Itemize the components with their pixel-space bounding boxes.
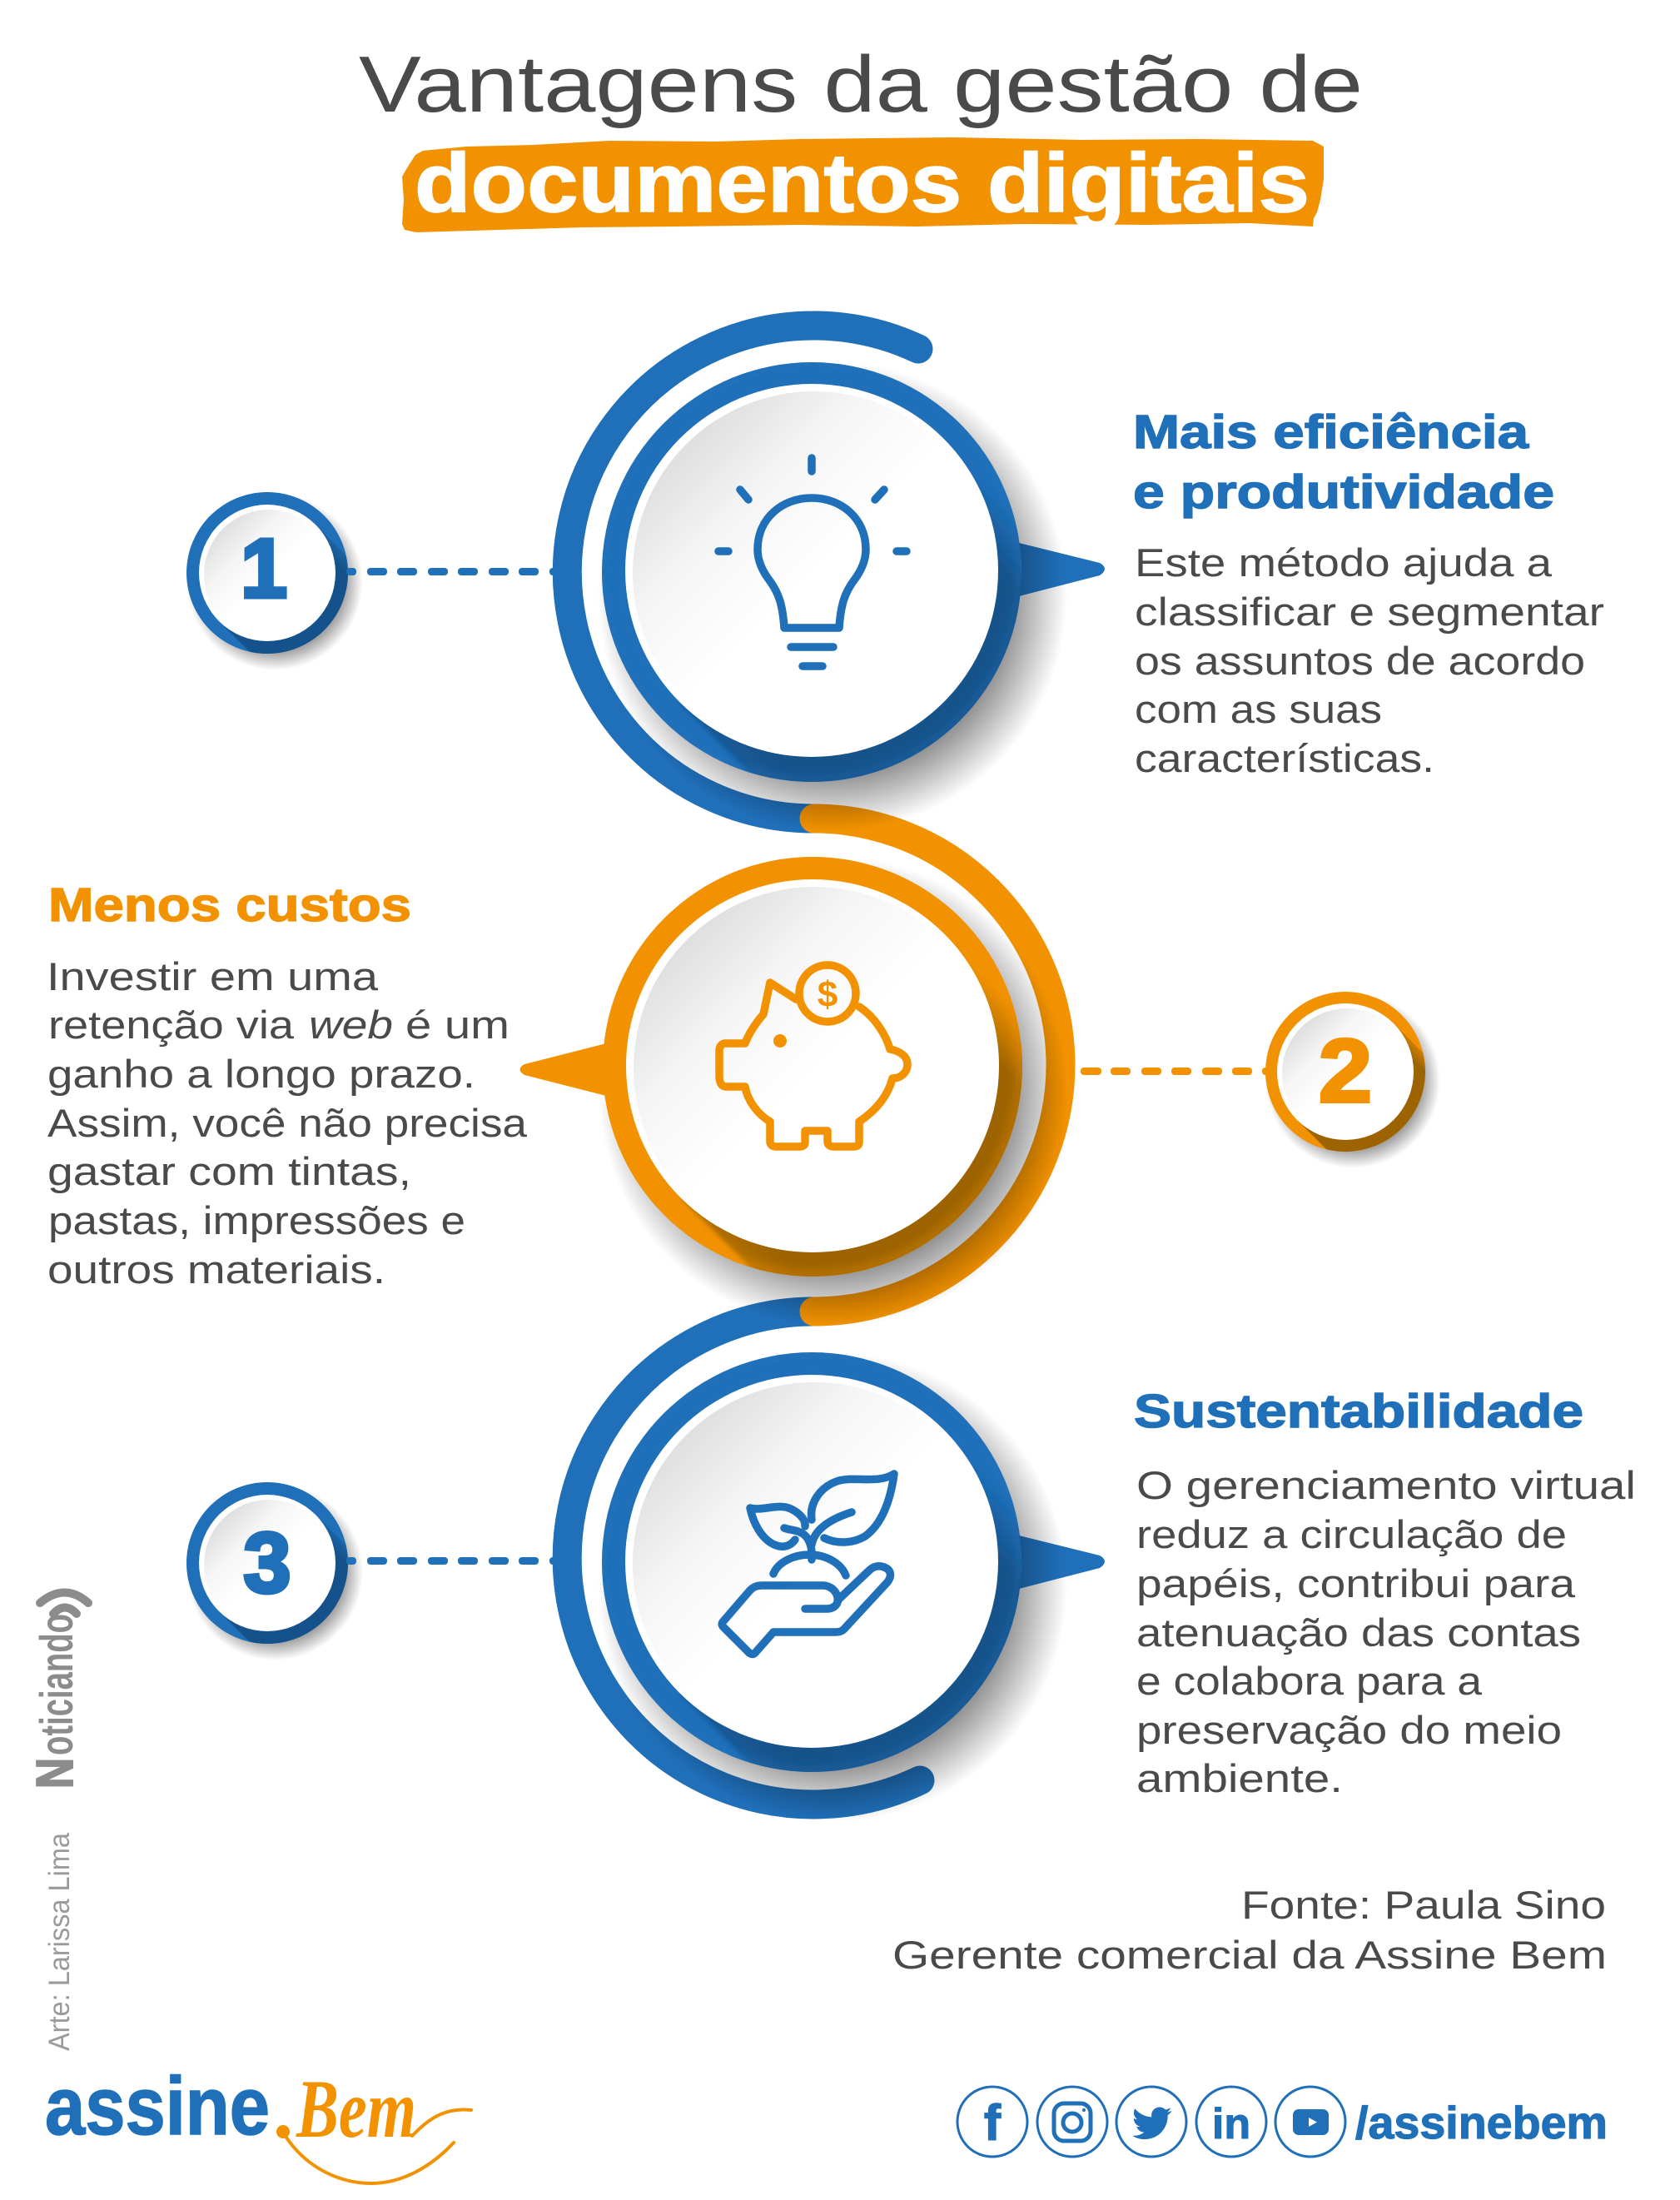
- connecting spiral arcs: [567, 326, 1061, 1804]
- body: outros materiais.: [47, 1247, 385, 1292]
- body: preservação do meio: [1136, 1708, 1562, 1752]
- Noticiando vertical logo: N: [27, 1758, 84, 1789]
- Assine Bem logo: Bem: [296, 2063, 416, 2155]
- icon: linkedin: in: [1212, 2100, 1250, 2148]
- dashed connector 1: [346, 568, 559, 575]
- text block: Menos custos: [47, 879, 528, 1292]
- icon: linkedin: [1196, 2087, 1266, 2157]
- body: papéis, contribui para: [1136, 1561, 1576, 1605]
- dashed connector 3: [346, 1557, 559, 1565]
- badge: number 1: [186, 492, 361, 669]
- Noticiando vertical logo: oticiando: [30, 1614, 82, 1755]
- body: retenção via: [48, 1003, 295, 1047]
- badge: number 2: [1265, 992, 1439, 1167]
- heading: Menos custos: [48, 879, 411, 932]
- text block: Sustentabilidade: [1134, 1385, 1636, 1800]
- heading: Sustentabilidade: [1134, 1385, 1583, 1438]
- body: reduz a circulação de: [1136, 1512, 1567, 1556]
- icon: light bulb: [718, 458, 907, 666]
- body: Assim, você não precisa: [47, 1101, 528, 1145]
- icon: instagram: [1037, 2087, 1107, 2157]
- body: ganho a longo prazo.: [47, 1052, 475, 1096]
- source credit: Gerente comercial da Assine Bem: [892, 1933, 1607, 1977]
- dashed connector 2: [1081, 1068, 1270, 1075]
- title line 1: Vantagens da gestão de: [359, 40, 1363, 129]
- icon: facebook: f: [984, 2095, 1002, 2151]
- body: Investir em uma: [47, 954, 379, 998]
- panel: step 3 circle: [602, 1352, 1105, 1817]
- handle: /assinebem: [1355, 2097, 1608, 2148]
- orange brush highlight: [402, 137, 1324, 232]
- badge: number 2: 2: [1319, 1020, 1372, 1121]
- body: gastar com tintas,: [47, 1149, 411, 1193]
- body: [47, 954, 528, 1292]
- body: com as suas: [1135, 687, 1382, 731]
- pointer right: [1019, 1536, 1105, 1589]
- panel: step 2 circle: $: [818, 974, 838, 1015]
- heading: e produtividade: [1133, 465, 1554, 519]
- body: Este método ajuda a: [1135, 540, 1553, 585]
- body: é um: [405, 1003, 509, 1047]
- heading: [1133, 406, 1554, 519]
- panel: step 2 circle: [519, 857, 1064, 1322]
- body: web: [309, 1003, 393, 1047]
- badge: number 3: [186, 1482, 361, 1659]
- icon: twitter: [1116, 2087, 1186, 2157]
- icon: youtube: [1275, 2087, 1345, 2157]
- Noticiando vertical logo: [27, 1592, 88, 1789]
- Assine Bem logo: assine: [45, 2060, 270, 2152]
- source credit: Fonte: Paula Sino: [1241, 1883, 1606, 1927]
- body: classificar e segmentar: [1135, 590, 1604, 634]
- body: os assuntos de acordo: [1135, 639, 1585, 683]
- title: [359, 40, 1363, 232]
- social media row: [957, 2087, 1608, 2157]
- icon: facebook: [957, 2087, 1027, 2157]
- body: pastas, impressões e: [48, 1198, 465, 1242]
- pointer right: [1019, 543, 1105, 596]
- icon: piggy bank: [719, 965, 907, 1147]
- body: ambiente.: [1136, 1756, 1343, 1800]
- art credit: Arte: Larissa Lima: [43, 1833, 76, 2051]
- body: atenuação das contas: [1136, 1610, 1581, 1655]
- title line 2: documentos digitais: [415, 137, 1310, 230]
- body: [1135, 540, 1604, 780]
- body: e colabora para a: [1136, 1659, 1483, 1703]
- pointer left: [519, 1041, 616, 1098]
- body: [1136, 1463, 1636, 1800]
- panel: step 1 circle: [602, 362, 1105, 828]
- badge: number 3: 3: [244, 1516, 291, 1610]
- heading: Mais eficiência: [1133, 406, 1530, 459]
- icon: plant in hand: [722, 1474, 894, 1654]
- text block: Mais eficiência: [1133, 406, 1604, 780]
- source credit: [892, 1883, 1607, 1977]
- Assine Bem logo: [45, 2060, 471, 2183]
- body: características.: [1135, 736, 1434, 780]
- badge: number 1: 1: [241, 522, 287, 615]
- body: O gerenciamento virtual: [1136, 1463, 1636, 1507]
